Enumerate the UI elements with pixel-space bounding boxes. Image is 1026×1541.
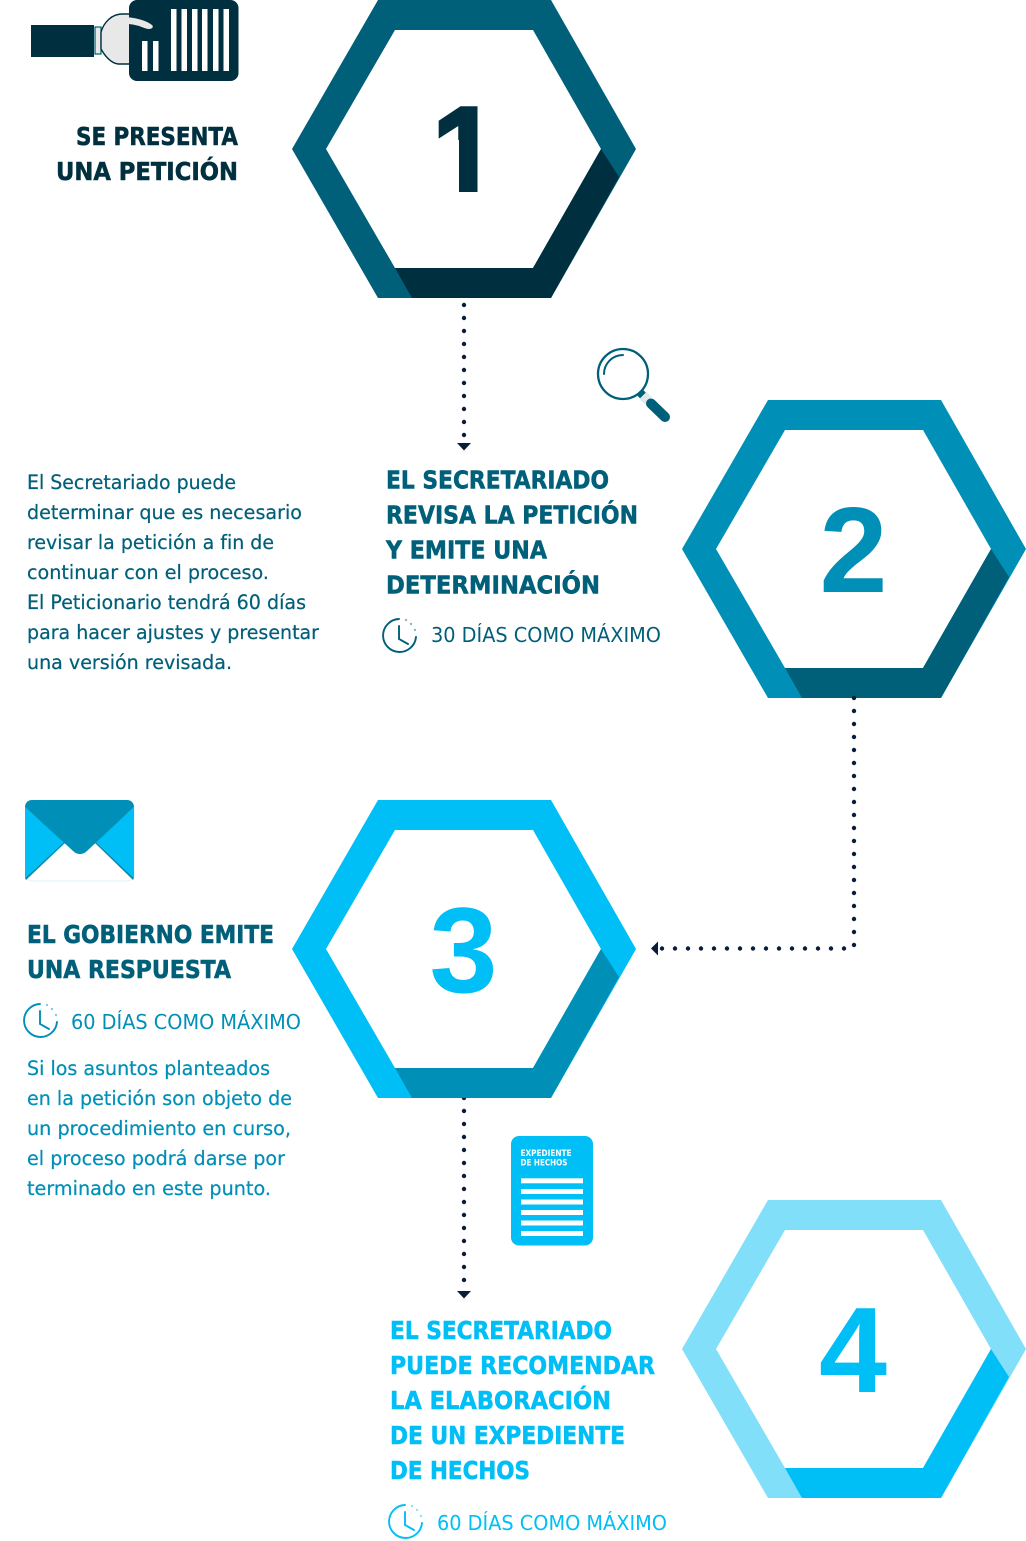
text: ongoing procedure note: el proceso podrá darse por bbox=[27, 1147, 286, 1170]
number 2: 2 bbox=[820, 482, 888, 618]
number 4: 4 bbox=[819, 1282, 887, 1418]
text: secretariat explanation: para hacer ajustes y presentar bbox=[27, 621, 320, 644]
text: secretariat explanation: El Secretariado puede bbox=[27, 471, 236, 494]
icon: fact file document: EXPEDIENTE bbox=[520, 1149, 572, 1159]
heading: step 1: UNA PETICIÓN bbox=[56, 156, 238, 186]
heading: step 2: DETERMINACIÓN bbox=[386, 570, 600, 600]
heading: step 2 bbox=[385, 466, 638, 600]
heading: step 4: DE HECHOS bbox=[390, 1456, 530, 1485]
arrow: step 1 to step 2 bbox=[457, 303, 471, 450]
icon: fact file document: DE HECHOS bbox=[520, 1158, 568, 1168]
heading: step 3: EL GOBIERNO EMITE bbox=[27, 920, 274, 949]
number 3: 3 bbox=[430, 882, 498, 1018]
hexagon 2 bbox=[682, 400, 1026, 698]
text: ongoing procedure note: en la petición son objeto de bbox=[27, 1087, 292, 1110]
icon: clock step 3 bbox=[24, 1004, 57, 1037]
text: 60 days step 3: 60 DÍAS COMO MÁXIMO bbox=[71, 1009, 301, 1034]
text: secretariat explanation: El Peticionario tendrá 60 días bbox=[27, 591, 306, 614]
text: secretariat explanation: continuar con el proceso. bbox=[27, 561, 269, 584]
heading: step 4: LA ELABORACIÓN bbox=[390, 1385, 611, 1415]
heading: step 3 bbox=[27, 920, 274, 984]
icon: hand presenting petition bbox=[31, 0, 238, 81]
icon: clock step 2 bbox=[383, 619, 416, 652]
heading: step 2: REVISA LA PETICIÓN bbox=[386, 500, 638, 530]
text: secretariat explanation: determinar que es necesario bbox=[27, 501, 302, 524]
hexagon 3 bbox=[292, 800, 636, 1098]
heading: step 4: DE UN EXPEDIENTE bbox=[390, 1421, 625, 1450]
text: 30 days: 30 DÍAS COMO MÁXIMO bbox=[431, 622, 661, 647]
text: secretariat explanation bbox=[27, 471, 320, 674]
text: ongoing procedure note: un procedimiento en curso, bbox=[27, 1117, 291, 1140]
icon: magnifying glass bbox=[598, 349, 665, 417]
arrow: step 3 to step 4 bbox=[457, 1096, 471, 1298]
heading: step 1: SE PRESENTA bbox=[76, 122, 238, 151]
text: secretariat explanation: una versión revisada. bbox=[27, 651, 232, 674]
number 1: 1 bbox=[432, 82, 498, 218]
heading: step 2: Y EMITE UNA bbox=[385, 536, 547, 564]
icon: envelope bbox=[25, 800, 134, 881]
icon: fact file document bbox=[511, 1136, 593, 1246]
hexagon 1 bbox=[292, 0, 636, 298]
heading: step 4: EL SECRETARIADO bbox=[390, 1316, 612, 1345]
text: secretariat explanation: revisar la petición a fin de bbox=[27, 531, 274, 554]
heading: step 2: EL SECRETARIADO bbox=[386, 466, 609, 494]
text: ongoing procedure note bbox=[27, 1057, 292, 1200]
heading: step 4: PUEDE RECOMENDAR bbox=[390, 1351, 655, 1380]
heading: step 1 bbox=[56, 122, 238, 186]
heading: step 3: UNA RESPUESTA bbox=[27, 955, 231, 984]
text: 60 days step 4: 60 DÍAS COMO MÁXIMO bbox=[437, 1510, 667, 1535]
hexagon 4 bbox=[682, 1200, 1026, 1498]
text: ongoing procedure note: Si los asuntos planteados bbox=[27, 1057, 270, 1080]
arrow: step 2 to step 3 bbox=[651, 696, 856, 956]
text: ongoing procedure note: terminado en este punto. bbox=[27, 1177, 271, 1200]
heading: step 4 bbox=[390, 1316, 655, 1485]
icon: clock step 4 bbox=[389, 1505, 422, 1538]
